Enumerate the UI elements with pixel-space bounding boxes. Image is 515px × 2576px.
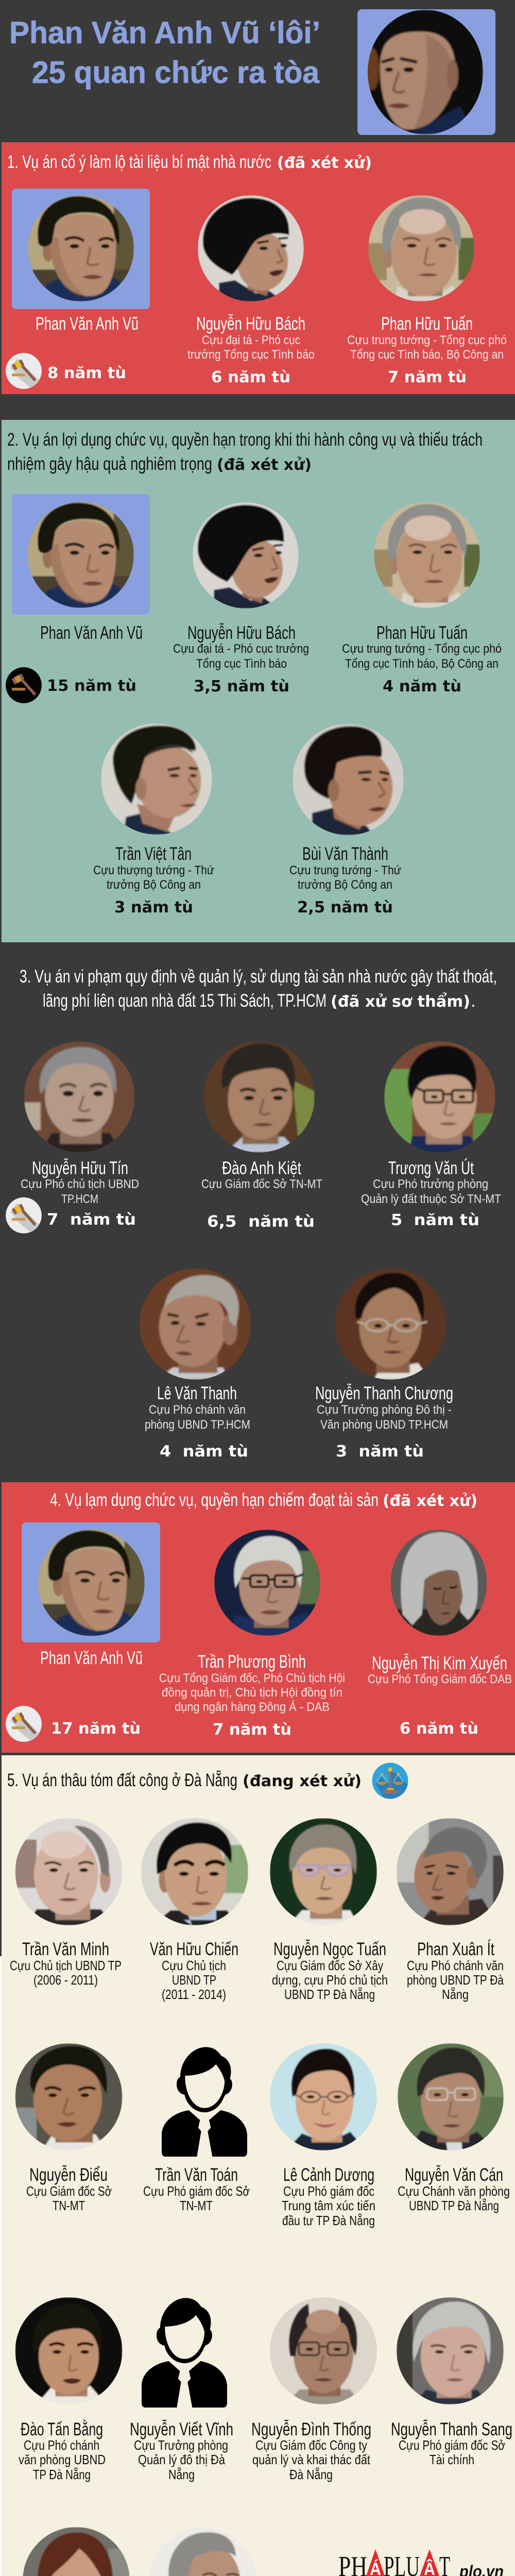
person: Phan Hữu Tuấn: Tổng cục Tình báo, Bộ Công an <box>345 657 499 671</box>
person: Phan Văn Anh Vũ <box>6 494 150 703</box>
person: Nguyễn Ngọc Tuấn: Nguyễn Ngọc Tuấn <box>273 1939 386 1959</box>
person: Văn Hữu Chiến: UBND TP <box>172 1972 216 1988</box>
person: Văn Hữu Chiến: Cựu Chủ tịch <box>162 1958 226 1973</box>
person: Phan Xuân Ít <box>397 1818 504 2002</box>
heading: case 2 <box>7 430 483 474</box>
heading: case 3 <box>20 967 497 1011</box>
person: Phan Hữu Tuấn: 4 năm tù <box>383 677 461 696</box>
person: Văn Hữu Chiến <box>141 1818 248 2002</box>
person: Trương Văn Út: 5 năm tù <box>391 1211 479 1229</box>
person: Nguyễn Ngọc Tuấn <box>270 1818 388 2002</box>
heading: case 5: (đang xét xử) <box>243 1772 362 1790</box>
title: Phan Văn Anh Vũ ‘lôi’ <box>9 15 320 50</box>
person: Nguyễn Hữu Bách: trưởng Tổng cục Tình báo <box>187 348 315 362</box>
person: Trần Văn Toán: Cựu Phó giám đốc Sở <box>143 2183 250 2199</box>
header <box>9 9 495 135</box>
person: Trần Việt Tân: Cựu thượng tướng - Thứ <box>93 863 214 877</box>
person: Lê Văn Thanh: 4 năm tù <box>160 1443 248 1461</box>
person: Nguyễn Thanh Sang: Tài chính <box>430 2452 474 2467</box>
person: Lê Cảnh Dương: Lê Cảnh Dương <box>283 2165 374 2185</box>
person: Nguyễn Thị Kim Xuyến <box>368 1530 512 1738</box>
person: Nguyễn Hữu Tín: Cựu Phó chủ tịch UBND <box>21 1177 139 1191</box>
person: Phan Văn Anh Vũ: Phan Văn Anh Vũ <box>36 314 139 334</box>
person: Nguyễn Hữu Bách <box>187 195 315 386</box>
portrait: Phan Văn Anh Vũ header <box>357 9 495 135</box>
person: Đào Tấn Bằng: TP Đà Nẵng <box>33 2467 91 2482</box>
icon: person silhouette <box>162 2047 247 2157</box>
person: Nguyễn Hữu Bách: Cựu đại tá - Phó cục trưởng <box>173 642 309 656</box>
heading: case 3: lãng phí liên quan nhà đất 15 Thi Sách, TP.HCM <box>43 991 327 1011</box>
person: Lê Văn Thanh: Cựu Phó chánh văn <box>149 1403 246 1417</box>
person: Trần Văn Minh <box>10 1818 123 1988</box>
person: Trần Phương Bình <box>159 1530 345 1739</box>
person: Lê Cảnh Dương: Trung tâm xúc tiến <box>282 2198 375 2213</box>
person: Nguyễn Viết Vĩnh <box>130 2298 233 2482</box>
title <box>9 15 320 90</box>
person: Nguyễn Đình Thống: Nguyễn Đình Thống <box>251 2419 371 2439</box>
person: Lê Cảnh Dương <box>270 2043 377 2228</box>
heading: case 1: 1. Vụ án cố ý làm lộ tài liệu bí mật nhà nước <box>7 152 271 172</box>
person: Trần Văn Minh: (2006 - 2011) <box>33 1972 98 1988</box>
person: Nguyễn Hữu Bách <box>173 502 309 696</box>
panel: case 3 <box>6 967 501 1461</box>
person: Nguyễn Đình Thống: quản lý và khai thác đất <box>252 2452 371 2467</box>
person: Nguyễn Hữu Bách: Tổng cục Tình báo <box>196 657 287 671</box>
person: Nguyễn Công Lang <box>148 2527 262 2576</box>
person: Lê Cảnh Dương: Cựu Phó giám đốc <box>283 2183 374 2199</box>
person: Nguyễn Ngọc Tuấn: UBND TP Đà Nẵng <box>284 1987 375 2002</box>
person: Đào Anh Kiệt: Cựu Giám đốc Sở TN-MT <box>201 1177 322 1191</box>
person: Trần Phương Bình: 7 năm tù <box>213 1721 291 1739</box>
person: Bùi Văn Thành: Cựu trung tướng - Thứ <box>289 863 401 877</box>
person: Đào Tấn Bằng: văn phòng UBND <box>19 2452 106 2467</box>
person: Nguyễn Thị Kim Xuyến: 6 năm tù <box>400 1720 478 1738</box>
person: Lê Văn Thanh: phòng UBND TP.HCM <box>145 1418 250 1432</box>
person: Trần Việt Tân: trưởng Bộ Công an <box>107 878 201 892</box>
person: Nguyễn Ngọc Tuấn: Cựu Giám đốc Sở Xây <box>277 1958 383 1973</box>
person: Trần Văn Toán: TN-MT <box>180 2198 213 2213</box>
person: Đào Anh Kiệt: 6,5 năm tù <box>207 1213 315 1231</box>
person: Nguyễn Hữu Tín: TP.HCM <box>61 1192 98 1206</box>
person: Trần Việt Tân <box>93 723 214 917</box>
person: Nguyễn Đình Thống <box>251 2297 377 2482</box>
person: Trương Văn Út: Quản lý đất thuộc Sở TN-MT <box>361 1192 501 1206</box>
person: Đào Tấn Bằng: Cựu Phó chánh <box>24 2437 99 2453</box>
person: Văn Hữu Chiến: Văn Hữu Chiến <box>150 1939 238 1959</box>
person: Trương Văn Út: Trương Văn Út <box>388 1158 474 1178</box>
person: Phan Hữu Tuấn <box>342 502 502 696</box>
heading: case 3: (đã xử sơ thẩm) <box>331 992 470 1011</box>
person: Nguyễn Hữu Bách: Nguyễn Hữu Bách <box>196 314 305 334</box>
person: Nguyễn Viết Vĩnh: Nguyễn Viết Vĩnh <box>130 2419 233 2439</box>
person: Trần Văn Toán <box>143 2047 250 2213</box>
person: Nguyễn Điểu: Cựu Giám đốc Sở <box>26 2183 112 2199</box>
person: Phan Văn Anh Vũ: 17 năm tù <box>51 1720 141 1738</box>
person: Bùi Văn Thành: trưởng Bộ Công an <box>298 878 392 892</box>
person: Trần Văn Minh: Trần Văn Minh <box>22 1939 109 1959</box>
person: Phan Hữu Tuấn: 7 năm tù <box>388 368 467 386</box>
person: Phan Hữu Tuấn: Phan Hữu Tuấn <box>376 623 468 643</box>
person: Trần Văn Minh: Cựu Chủ tịch UBND TP <box>10 1958 122 1973</box>
person: Phan Văn Anh Vũ: 15 năm tù <box>47 677 136 695</box>
person: Phan Xuân Ít: Nẵng <box>442 1987 469 2002</box>
person: Nguyễn Điểu: TN-MT <box>53 2198 85 2213</box>
person: Nguyễn Điểu <box>15 2043 123 2213</box>
person: Nguyễn Thanh Chương: 3 năm tù <box>336 1443 424 1461</box>
heading: case 1: (đã xét xử) <box>277 154 372 172</box>
person: Phan Văn Anh Vũ: Phan Văn Anh Vũ <box>40 623 143 643</box>
panel: case 5 <box>2 1755 515 2576</box>
person: Phan Văn Anh Vũ: Phan Văn Anh Vũ <box>40 1648 143 1668</box>
person: Phan Hữu Tuấn: Cựu trung tướng - Tổng cục phó <box>342 642 502 656</box>
person: Đào Tấn Bằng <box>15 2297 123 2482</box>
person: Nguyễn Hữu Tín: Nguyễn Hữu Tín <box>32 1158 128 1178</box>
person: Trần Phương Bình: dụng ngân hàng Đông Á - DAB <box>175 1700 330 1714</box>
person: Văn Hữu Chiến: (2011 - 2014) <box>162 1987 226 2002</box>
person: Phan Văn Anh Vũ <box>6 1522 160 1744</box>
person: Nguyễn Hữu Tín <box>6 1042 139 1236</box>
heading: case 3: . <box>471 991 476 1011</box>
icon: scales of justice <box>372 1763 408 1799</box>
person: Phan Hữu Tuấn: Phan Hữu Tuấn <box>381 314 473 334</box>
heading: case 4: (đã xét xử) <box>383 1492 477 1510</box>
person: Phan Hữu Tuấn <box>347 195 507 386</box>
person: Nguyễn Viết Vĩnh: Cựu Trưởng phòng <box>134 2437 228 2453</box>
person: Nguyễn Hữu Bách: 3,5 năm tù <box>194 677 289 696</box>
logo: Pháp Luật plo.vn <box>338 2549 504 2576</box>
person: Bùi Văn Thành: Bùi Văn Thành <box>302 844 388 864</box>
person: Trương Văn Út <box>361 1041 501 1229</box>
heading: case 4: 4. Vụ lạm dụng chức vụ, quyền hạn chiếm đoạt tài sản <box>50 1490 379 1510</box>
person: Đào Anh Kiệt <box>201 1041 322 1231</box>
panel: case 1 <box>2 142 515 394</box>
person: Nguyễn Văn Cán <box>398 2043 510 2213</box>
person: Nguyễn Hữu Bách: Nguyễn Hữu Bách <box>187 623 296 643</box>
person: Trần Phương Bình: Cựu Tổng Giám đốc, Phó Chủ tịch Hội <box>159 1671 345 1685</box>
person: Nguyễn Điểu: Nguyễn Điểu <box>29 2165 108 2185</box>
heading: case 2: nhiệm gây hậu quả nghiêm trọng <box>7 454 212 474</box>
title: 25 quan chức ra tòa <box>32 55 320 90</box>
person: Nguyễn Đình Thống: Cựu Giám đốc Công ty <box>255 2437 367 2453</box>
person: Lê Văn Thanh: Lê Văn Thanh <box>157 1383 237 1403</box>
person: Trần Việt Tân: Trần Việt Tân <box>115 844 192 864</box>
person: Lê Cảnh Dương: đầu tư TP Đà Nẵng <box>282 2213 375 2228</box>
person: Đào Tấn Bằng: Đào Tấn Bằng <box>21 2419 103 2439</box>
person: Trương Văn Út: Cựu Phó trưởng phòng <box>373 1177 488 1191</box>
person: Trần Phương Bình: đồng quản trị, Chủ tịch Hội đồng tín <box>162 1686 342 1700</box>
person: Nguyễn Thanh Chương: Nguyễn Thanh Chương <box>315 1383 453 1403</box>
person: Bùi Văn Thành <box>289 724 404 917</box>
person: Nguyễn Thanh Chương: Văn phòng UBND TP.HCM <box>320 1418 448 1432</box>
person: Trần Phương Bình: Trần Phương Bình <box>198 1652 306 1672</box>
person: Nguyễn Viết Vĩnh: Quản lý đô thị Đà <box>138 2452 225 2467</box>
person: Nguyễn Ngọc Tuấn: dựng, cựu Phó chủ tịch <box>272 1972 388 1988</box>
heading: case 5: 5. Vụ án thâu tóm đất công ở Đà Nẵng <box>7 1770 237 1790</box>
person: Nguyễn Hữu Bách: Cựu đại tá - Phó cục <box>202 333 300 347</box>
person: Nguyễn Thanh Sang <box>391 2297 512 2467</box>
person: Phan Văn Anh Vũ: 8 năm tù <box>47 364 126 382</box>
person: Nguyễn Viết Vĩnh: Nẵng <box>168 2467 195 2482</box>
person: Nguyễn Thị Thu Hà <box>15 2527 130 2576</box>
panel: case 2 <box>2 420 515 942</box>
person: Phan Văn Anh Vũ <box>6 189 150 392</box>
heading: case 2: (đã xét xử) <box>217 456 312 474</box>
icon: person silhouette <box>142 2298 227 2408</box>
person: Nguyễn Thanh Chương: Cựu Trưởng phòng Đô thị - <box>317 1403 452 1417</box>
person: Trần Văn Toán: Trần Văn Toán <box>155 2165 238 2185</box>
person: Nguyễn Đình Thống: Đà Nẵng <box>289 2467 333 2482</box>
person: Đào Anh Kiệt: Đào Anh Kiệt <box>222 1158 301 1178</box>
person: Nguyễn Hữu Tín: 7 năm tù <box>47 1211 136 1229</box>
person: Bùi Văn Thành: 2,5 năm tù <box>297 899 393 917</box>
person: Nguyễn Thanh Chương <box>315 1268 453 1461</box>
person: Nguyễn Hữu Bách: 6 năm tù <box>211 368 290 386</box>
panel: case 4 <box>2 1482 515 1753</box>
person: Trần Việt Tân: 3 năm tù <box>114 899 193 917</box>
person: Lê Văn Thanh <box>140 1268 251 1461</box>
